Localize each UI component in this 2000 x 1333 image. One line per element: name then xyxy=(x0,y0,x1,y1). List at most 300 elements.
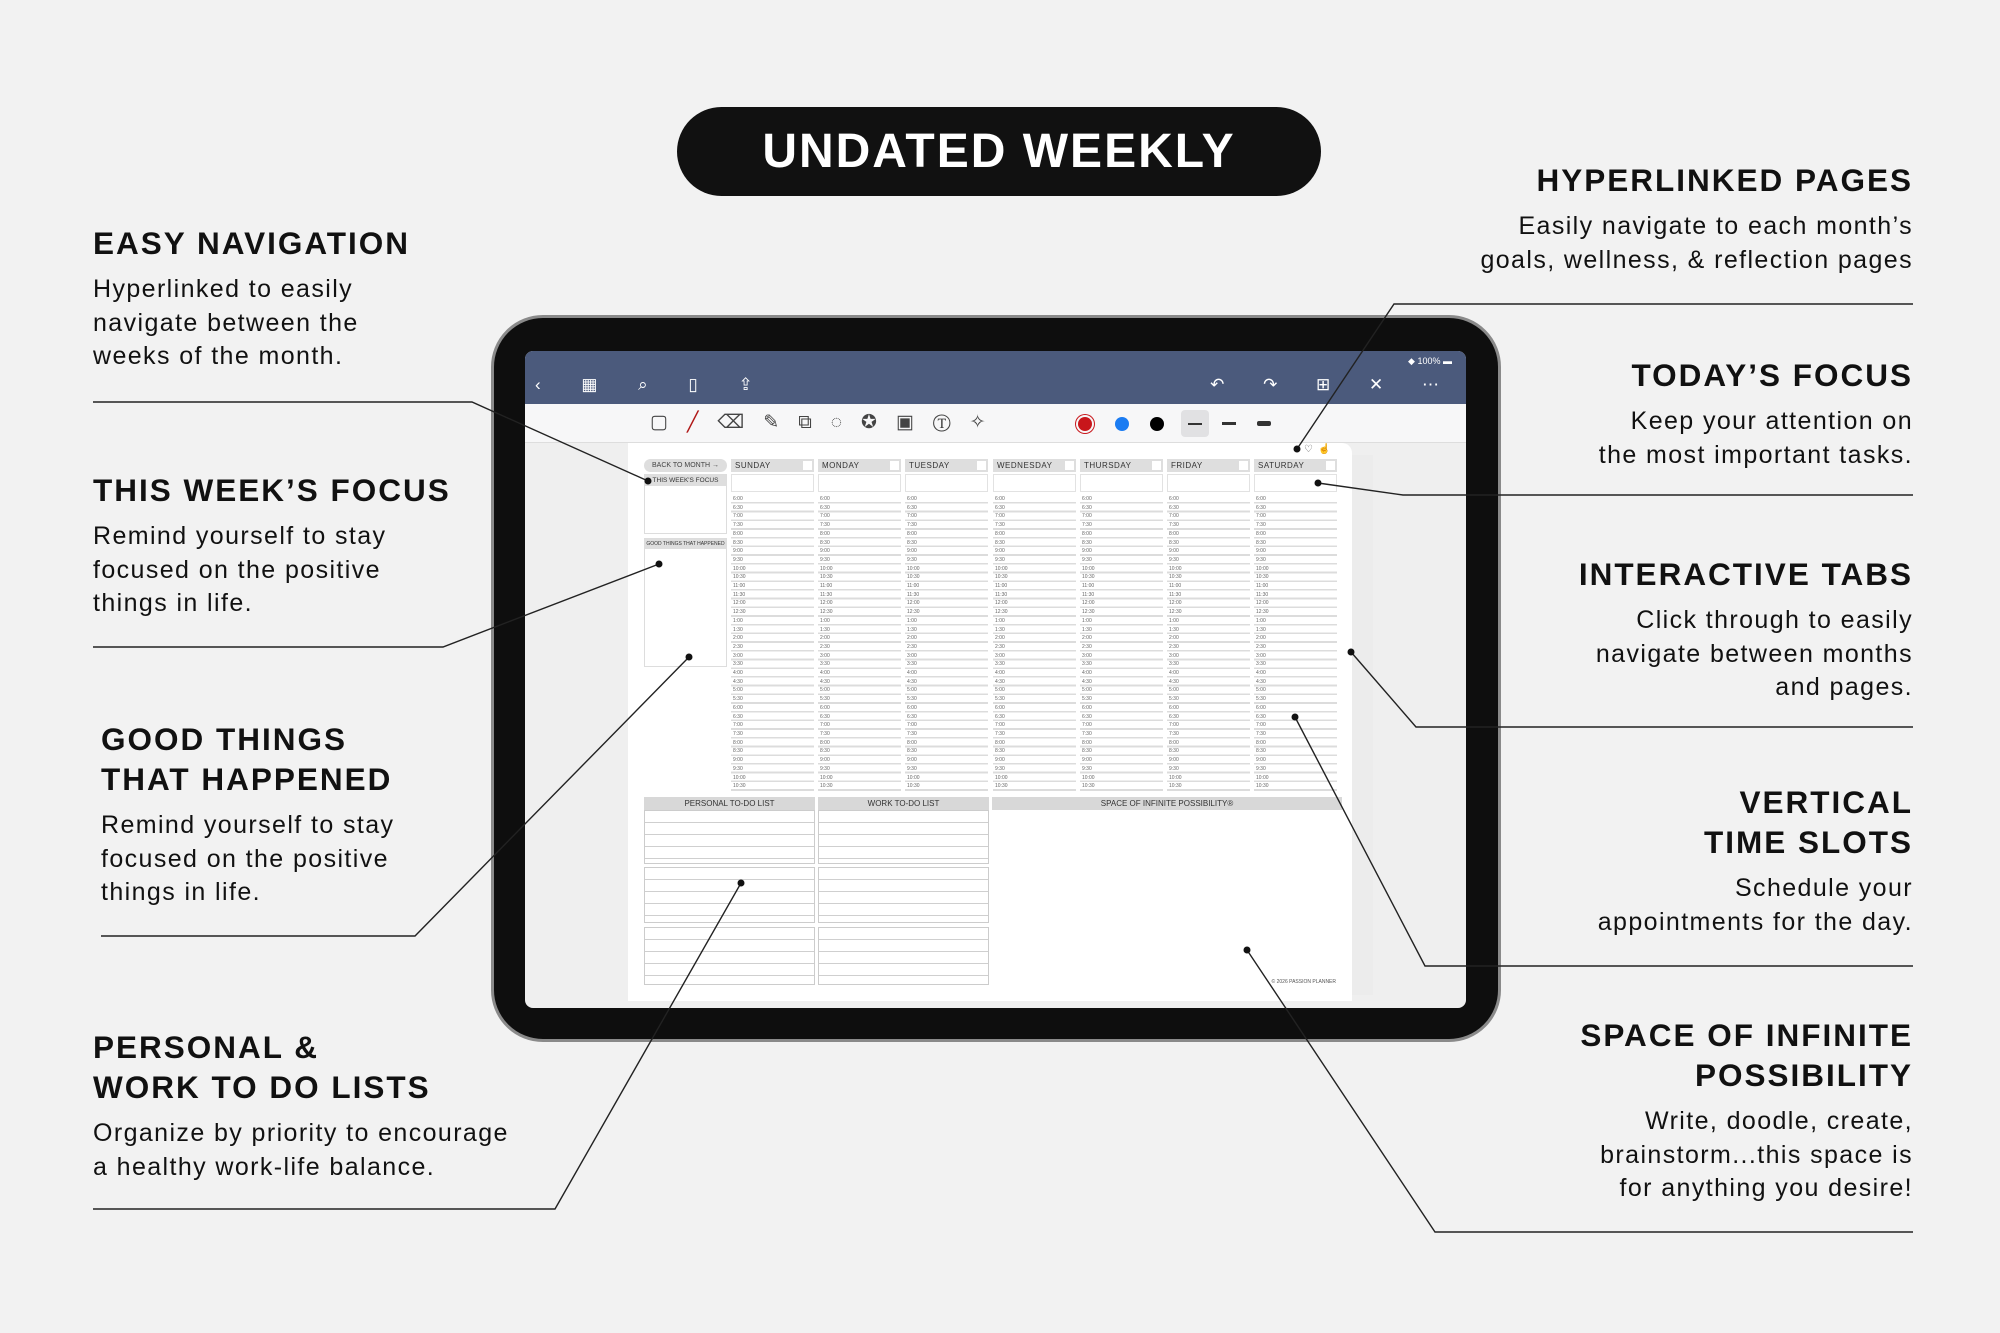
text: 9:00 xyxy=(907,548,917,554)
text: 11:00 xyxy=(995,583,1007,589)
text: FRIDAY xyxy=(1171,461,1203,470)
callout: this week's focus: things in life. xyxy=(93,589,253,617)
text: 7:00 xyxy=(820,513,830,519)
text: 8:30 xyxy=(1169,540,1179,546)
text: 9:00 xyxy=(733,548,743,554)
callout: space of infinite possibility: SPACE OF INFINITE xyxy=(1580,1017,1913,1053)
callout: today's focus xyxy=(1599,357,1913,468)
text: 7:00 xyxy=(820,722,830,728)
text: 1:00 xyxy=(995,618,1005,624)
text: 10:00 xyxy=(907,774,920,780)
callout: good things that happened: THAT HAPPENED xyxy=(101,761,392,797)
text: 1:00 xyxy=(820,618,830,624)
text: 12:00 xyxy=(1169,600,1182,606)
callout: space of infinite possibility xyxy=(1580,1017,1913,1202)
text: 6:00 xyxy=(1256,496,1266,502)
text: 6:30 xyxy=(820,505,830,511)
callout: this week's focus: THIS WEEK’S FOCUS xyxy=(93,472,451,508)
text: 1:00 xyxy=(1082,618,1092,624)
text: THURSDAY xyxy=(1084,461,1131,470)
right nav icons: ↶ ↷ ⊞ ✕ ⋯ xyxy=(1210,375,1456,394)
callout: good things that happened xyxy=(101,721,394,906)
text: 6:00 xyxy=(907,705,917,711)
callout: personal & work to do lists: a healthy work-life balance. xyxy=(93,1152,435,1180)
text: 10:00 xyxy=(733,774,746,780)
text: 12:00 xyxy=(1256,600,1269,606)
text: 6:00 xyxy=(820,496,830,502)
text: 6:00 xyxy=(1082,496,1092,502)
text: 4:30 xyxy=(1169,679,1179,685)
text: 10:30 xyxy=(1082,783,1095,789)
navy top bar xyxy=(525,351,1466,404)
text: 12:30 xyxy=(907,609,920,615)
text: 7:00 xyxy=(1169,722,1179,728)
text: 2:00 xyxy=(995,635,1005,641)
tool icons: ▢╱⌫✎⧉◌✪▣Ⓣ✧ xyxy=(650,412,1005,433)
text: 7:00 xyxy=(1082,513,1092,519)
text: 9:30 xyxy=(907,766,917,772)
text: 11:30 xyxy=(995,592,1007,598)
text: 3:00 xyxy=(1082,653,1092,659)
planner page xyxy=(628,443,1352,1001)
text: 8:00 xyxy=(1169,531,1179,537)
callout: vertical time slots: appointments for the day. xyxy=(1598,908,1913,936)
text: 2:30 xyxy=(820,644,830,650)
callout: hyperlinked pages xyxy=(1480,162,1913,274)
text: 9:30 xyxy=(820,766,830,772)
text: 3:00 xyxy=(907,653,917,659)
text: 7:30 xyxy=(733,522,743,528)
text: 2:00 xyxy=(1082,635,1092,641)
text: 7:30 xyxy=(1082,522,1092,528)
text: 7:30 xyxy=(995,522,1005,528)
text: 5:30 xyxy=(995,696,1005,702)
text: 8:00 xyxy=(1082,531,1092,537)
callout: hyperlinked pages: Easily navigate to each month’s xyxy=(1518,212,1913,240)
text: 5:30 xyxy=(733,696,743,702)
text: 5:00 xyxy=(995,687,1005,693)
text: 9:30 xyxy=(1169,766,1179,772)
text: 9:30 xyxy=(733,557,743,563)
text: 6:30 xyxy=(733,714,743,720)
text: 6:30 xyxy=(1082,505,1092,511)
screen xyxy=(525,351,1466,1008)
text: 7:30 xyxy=(820,731,830,737)
text: 6:00 xyxy=(907,496,917,502)
text: 12:30 xyxy=(1082,609,1095,615)
text: 2:30 xyxy=(1082,644,1092,650)
callout: personal & work to do lists: Organize by priority to encourage xyxy=(93,1119,509,1147)
text: 12:30 xyxy=(995,609,1008,615)
text: 7:00 xyxy=(733,513,743,519)
text: 1:30 xyxy=(1256,627,1266,633)
text: 11:30 xyxy=(1082,592,1094,598)
text: 2:00 xyxy=(1256,635,1266,641)
text: 6:30 xyxy=(907,714,917,720)
text: 5:00 xyxy=(1169,687,1179,693)
text: WORK TO-DO LIST xyxy=(868,799,939,808)
text: 7:30 xyxy=(995,731,1005,737)
text: 8:30 xyxy=(820,748,830,754)
text: 3:00 xyxy=(995,653,1005,659)
text: 1:30 xyxy=(995,627,1005,633)
text: 1:30 xyxy=(1169,627,1179,633)
back to month: BACK TO MONTH → xyxy=(652,462,719,469)
text: 10:00 xyxy=(995,566,1008,572)
text: 5:30 xyxy=(1169,696,1179,702)
text: 2:30 xyxy=(1256,644,1266,650)
text: 6:00 xyxy=(1169,705,1179,711)
text: 3:30 xyxy=(995,661,1005,667)
text: 10:00 xyxy=(733,566,746,572)
color swatches xyxy=(1078,417,1092,431)
text: 2:30 xyxy=(733,644,743,650)
title pill xyxy=(677,107,1321,196)
text: 6:00 xyxy=(733,705,743,711)
text: 8:30 xyxy=(733,748,743,754)
text: 9:00 xyxy=(1082,757,1092,763)
text: 11:00 xyxy=(1169,583,1181,589)
text: 10:30 xyxy=(995,574,1008,580)
text: 3:30 xyxy=(733,661,743,667)
text: 10:30 xyxy=(1169,574,1182,580)
callout: good things that happened: Remind yourself to stay xyxy=(101,811,394,839)
text: 4:00 xyxy=(1082,670,1092,676)
text: 7:00 xyxy=(1169,513,1179,519)
text: 6:00 xyxy=(733,496,743,502)
text: 10:30 xyxy=(820,574,833,580)
text: 7:30 xyxy=(907,522,917,528)
callout: good things that happened: things in life. xyxy=(101,878,261,906)
callout: this week's focus: focused on the positive xyxy=(93,556,381,584)
title pill: UNDATED WEEKLY xyxy=(762,125,1236,178)
text: 9:00 xyxy=(820,757,830,763)
text: 2:00 xyxy=(733,635,743,641)
text: 9:30 xyxy=(995,557,1005,563)
callout: vertical time slots: TIME SLOTS xyxy=(1704,824,1913,860)
text: 10:00 xyxy=(1082,566,1095,572)
text: 9:00 xyxy=(1256,548,1266,554)
text: 8:00 xyxy=(995,531,1005,537)
text: 4:00 xyxy=(820,670,830,676)
time slots grid xyxy=(731,496,1337,791)
text: 9:30 xyxy=(1256,766,1266,772)
text: 10:30 xyxy=(1256,783,1269,789)
text: 5:00 xyxy=(1082,687,1092,693)
text: 7:00 xyxy=(1256,513,1266,519)
text: 4:30 xyxy=(733,679,743,685)
text: 12:00 xyxy=(995,600,1008,606)
this week's focus box xyxy=(644,474,727,534)
text: 3:00 xyxy=(820,653,830,659)
text: 3:30 xyxy=(820,661,830,667)
text: 11:00 xyxy=(820,583,832,589)
good things box xyxy=(644,538,727,667)
text: 8:00 xyxy=(1082,740,1092,746)
text: 5:00 xyxy=(907,687,917,693)
text: 8:00 xyxy=(820,740,830,746)
text: 2:30 xyxy=(907,644,917,650)
text: 8:00 xyxy=(907,531,917,537)
text: 12:30 xyxy=(733,609,746,615)
text: 8:00 xyxy=(1169,740,1179,746)
text: 7:30 xyxy=(733,731,743,737)
callout: hyperlinked pages: HYPERLINKED PAGES xyxy=(1537,162,1913,198)
text: 1:00 xyxy=(733,618,743,624)
callout: easy navigation: navigate between the xyxy=(93,308,359,336)
callout: vertical time slots: Schedule your xyxy=(1735,874,1913,902)
text: 7:30 xyxy=(1256,522,1266,528)
text: 8:30 xyxy=(907,540,917,546)
text: 6:30 xyxy=(995,714,1005,720)
left nav icons: ‹ ▦ ⌕ ▯ ⇪ xyxy=(535,375,771,394)
callout: interactive tabs: navigate between months xyxy=(1596,640,1913,668)
text: 12:30 xyxy=(1169,609,1182,615)
space of infinite possibility box xyxy=(992,797,1342,985)
text: 1:30 xyxy=(907,627,917,633)
text: 6:30 xyxy=(820,714,830,720)
text: 6:00 xyxy=(995,496,1005,502)
text: 4:00 xyxy=(1169,670,1179,676)
text: 3:30 xyxy=(907,661,917,667)
text: 7:00 xyxy=(733,722,743,728)
text: 10:00 xyxy=(1256,566,1269,572)
callout: space of infinite possibility: for anything you desire! xyxy=(1620,1174,1913,1202)
text: 8:00 xyxy=(995,740,1005,746)
text: 3:30 xyxy=(1256,661,1266,667)
text: 4:30 xyxy=(995,679,1005,685)
text: WEDNESDAY xyxy=(997,461,1052,470)
text: 11:00 xyxy=(733,583,745,589)
text: 8:30 xyxy=(995,748,1005,754)
text: MONDAY xyxy=(822,461,860,470)
space of infinite possibility box: © 2026 PASSION PLANNER xyxy=(1272,979,1336,985)
text: 6:30 xyxy=(907,505,917,511)
callout: this week's focus xyxy=(93,472,451,617)
text: 8:00 xyxy=(733,531,743,537)
text: 1:30 xyxy=(1082,627,1092,633)
text: 10:30 xyxy=(820,783,833,789)
text: 9:30 xyxy=(907,557,917,563)
callout: vertical time slots xyxy=(1598,784,1913,936)
callout: personal & work to do lists: WORK TO DO LISTS xyxy=(93,1069,431,1105)
day headers xyxy=(731,459,1337,492)
text: 12:00 xyxy=(733,600,746,606)
text: 7:30 xyxy=(1082,731,1092,737)
text: 6:30 xyxy=(1082,714,1092,720)
callout: easy navigation: EASY NAVIGATION xyxy=(93,225,410,261)
text: SUNDAY xyxy=(735,461,771,470)
text: 5:00 xyxy=(820,687,830,693)
text: 9:00 xyxy=(995,757,1005,763)
space of infinite possibility box: SPACE OF INFINITE POSSIBILITY® xyxy=(1101,799,1233,808)
text: 12:30 xyxy=(820,609,833,615)
text: 1:00 xyxy=(1256,618,1266,624)
good things box: GOOD THINGS THAT HAPPENED xyxy=(646,541,725,547)
text: TUESDAY xyxy=(909,461,950,470)
back to month xyxy=(644,459,727,472)
text: 8:30 xyxy=(1256,540,1266,546)
text: 11:00 xyxy=(1082,583,1094,589)
callout: easy navigation: weeks of the month. xyxy=(93,342,343,370)
text: 2:30 xyxy=(1169,644,1179,650)
text: 12:00 xyxy=(907,600,920,606)
text: 10:30 xyxy=(907,574,920,580)
text: 2:30 xyxy=(995,644,1005,650)
toolbar xyxy=(525,404,1466,443)
text: 5:30 xyxy=(820,696,830,702)
text: 10:30 xyxy=(1169,783,1182,789)
text: 3:30 xyxy=(1169,661,1179,667)
text: 4:30 xyxy=(820,679,830,685)
text: 3:00 xyxy=(1256,653,1266,659)
text: 7:00 xyxy=(995,722,1005,728)
text: 8:30 xyxy=(733,540,743,546)
text: 9:30 xyxy=(1082,766,1092,772)
text: 5:30 xyxy=(1256,696,1266,702)
text: 3:30 xyxy=(1082,661,1092,667)
text: 7:00 xyxy=(907,722,917,728)
text: 9:00 xyxy=(733,757,743,763)
tablet device xyxy=(491,315,1501,1042)
text: 4:00 xyxy=(733,670,743,676)
callout: hyperlinked pages: goals, wellness, & reflection pages xyxy=(1480,246,1913,274)
text: 10:00 xyxy=(1082,774,1095,780)
text: 7:00 xyxy=(907,513,917,519)
text: 11:30 xyxy=(907,592,919,598)
text: 8:00 xyxy=(1256,740,1266,746)
text: 4:30 xyxy=(907,679,917,685)
text: 11:00 xyxy=(1256,583,1268,589)
text: SATURDAY xyxy=(1258,461,1304,470)
text: 6:00 xyxy=(995,705,1005,711)
text: 10:00 xyxy=(820,774,833,780)
text: 6:00 xyxy=(1169,496,1179,502)
text: 7:00 xyxy=(1082,722,1092,728)
text: 8:30 xyxy=(820,540,830,546)
text: 10:30 xyxy=(733,783,746,789)
text: 2:00 xyxy=(1169,635,1179,641)
text: 6:00 xyxy=(1082,705,1092,711)
callout: easy navigation xyxy=(93,225,410,370)
text: 9:30 xyxy=(995,766,1005,772)
text: 7:30 xyxy=(1256,731,1266,737)
text: 8:00 xyxy=(907,740,917,746)
callout: today's focus: TODAY’S FOCUS xyxy=(1631,357,1913,393)
callout: space of infinite possibility: brainstorm...this space is xyxy=(1600,1140,1913,1168)
callout: this week's focus: Remind yourself to stay xyxy=(93,522,386,550)
callout: interactive tabs xyxy=(1579,556,1913,701)
text: 9:00 xyxy=(995,548,1005,554)
status: ◆ 100% ▬ xyxy=(1408,356,1452,366)
text: 5:00 xyxy=(733,687,743,693)
text: 7:00 xyxy=(1256,722,1266,728)
callout: good things that happened: focused on the positive xyxy=(101,844,389,872)
text: 9:30 xyxy=(733,766,743,772)
text: 10:00 xyxy=(995,774,1008,780)
text: 5:00 xyxy=(1256,687,1266,693)
text: 12:30 xyxy=(1256,609,1269,615)
text: 7:30 xyxy=(1169,731,1179,737)
text: 9:30 xyxy=(820,557,830,563)
callout: easy navigation: Hyperlinked to easily xyxy=(93,275,353,303)
text: 10:30 xyxy=(1082,574,1095,580)
text: 6:00 xyxy=(820,705,830,711)
text: 10:00 xyxy=(1256,774,1269,780)
text: 8:30 xyxy=(1082,748,1092,754)
text: 9:00 xyxy=(820,548,830,554)
text: 9:00 xyxy=(1169,548,1179,554)
text: 11:30 xyxy=(1256,592,1268,598)
callout: interactive tabs: INTERACTIVE TABS xyxy=(1579,556,1913,592)
text: 10:30 xyxy=(995,783,1008,789)
text: 1:00 xyxy=(1169,618,1179,624)
text: 5:30 xyxy=(907,696,917,702)
header icons: ●♡☝ xyxy=(1293,444,1335,455)
text: 9:00 xyxy=(1082,548,1092,554)
callout: vertical time slots: VERTICAL xyxy=(1740,784,1913,820)
text: 8:30 xyxy=(1256,748,1266,754)
text: 1:00 xyxy=(907,618,917,624)
text: 10:30 xyxy=(1256,574,1269,580)
text: 6:30 xyxy=(995,505,1005,511)
callout: space of infinite possibility: Write, doodle, create, xyxy=(1645,1107,1913,1135)
text: 10:00 xyxy=(1169,774,1182,780)
callout: today's focus: Keep your attention on xyxy=(1631,407,1913,435)
text: 11:00 xyxy=(907,583,919,589)
text: 9:00 xyxy=(1169,757,1179,763)
text: 4:00 xyxy=(995,670,1005,676)
text: 9:30 xyxy=(1256,557,1266,563)
text: 6:30 xyxy=(1256,505,1266,511)
text: 9:30 xyxy=(1169,557,1179,563)
text: 10:00 xyxy=(1169,566,1182,572)
callout: interactive tabs: and pages. xyxy=(1775,673,1913,701)
text: 1:30 xyxy=(733,627,743,633)
to-do lists xyxy=(644,797,989,985)
text: 9:00 xyxy=(907,757,917,763)
text: 2:00 xyxy=(820,635,830,641)
text: 7:30 xyxy=(820,522,830,528)
text: 6:30 xyxy=(1256,714,1266,720)
text: 4:30 xyxy=(1082,679,1092,685)
callout: interactive tabs: Click through to easily xyxy=(1636,606,1913,634)
callout: personal & work to do lists: PERSONAL & xyxy=(93,1029,319,1065)
text: 11:30 xyxy=(820,592,832,598)
text: 5:30 xyxy=(1082,696,1092,702)
month tabs xyxy=(1352,455,1373,995)
text: 8:30 xyxy=(907,748,917,754)
callout: today's focus: the most important tasks. xyxy=(1599,440,1913,468)
text: 1:30 xyxy=(820,627,830,633)
text: 9:00 xyxy=(1256,757,1266,763)
text: 12:00 xyxy=(820,600,833,606)
text: 8:00 xyxy=(733,740,743,746)
text: 10:00 xyxy=(907,566,920,572)
text: 4:00 xyxy=(907,670,917,676)
text: 6:30 xyxy=(1169,505,1179,511)
text: 8:00 xyxy=(1256,531,1266,537)
text: 10:30 xyxy=(907,783,920,789)
text: 12:00 xyxy=(1082,600,1095,606)
text: 8:00 xyxy=(820,531,830,537)
this week's focus box: THIS WEEK'S FOCUS xyxy=(653,477,718,484)
text: 6:30 xyxy=(1169,714,1179,720)
text: 10:30 xyxy=(733,574,746,580)
text: 11:30 xyxy=(1169,592,1181,598)
text: 6:30 xyxy=(733,505,743,511)
text: 9:30 xyxy=(1082,557,1092,563)
